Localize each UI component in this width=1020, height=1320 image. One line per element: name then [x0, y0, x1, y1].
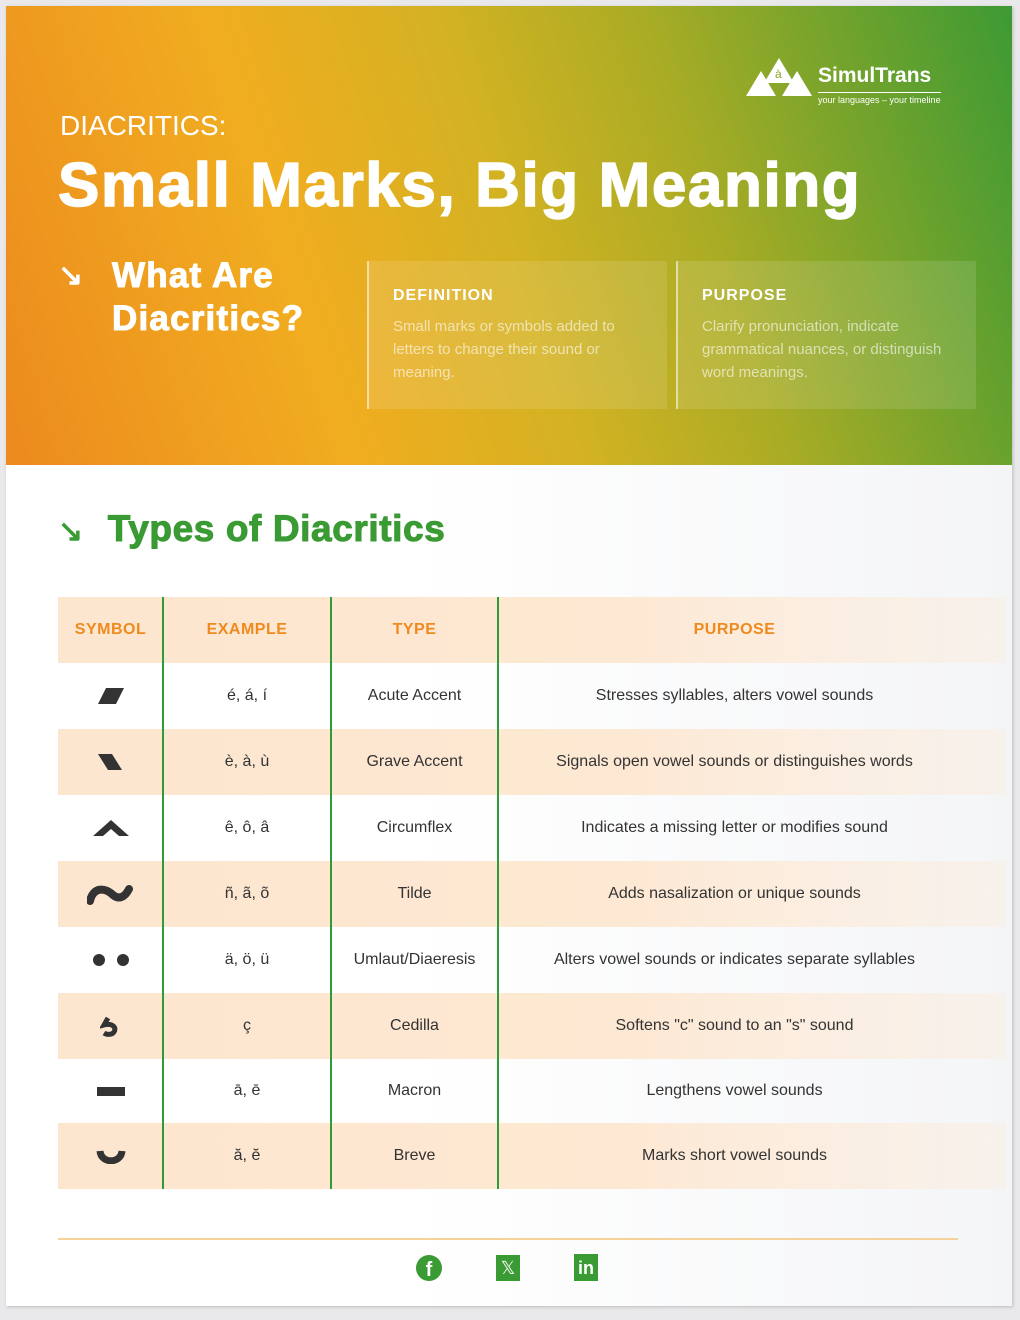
- icon: x: [496, 1255, 520, 1281]
- panel: purpose: Clarify pronunciation, indicate grammatical nuances, or distinguish word meanings.: [702, 318, 941, 381]
- table: ă, ĕ: [234, 1147, 260, 1164]
- table: ç: [243, 1017, 251, 1034]
- table: Signals open vowel sounds or distinguishes words: [556, 753, 913, 770]
- table: Acute Accent: [368, 687, 461, 704]
- table: PURPOSE: [694, 621, 775, 638]
- table: SYMBOL: [75, 621, 146, 638]
- panel: purpose: [676, 261, 976, 409]
- icon: x: 𝕏: [501, 1258, 515, 1278]
- icon: facebook: f: [426, 1259, 432, 1281]
- panel: purpose: PURPOSE: [702, 287, 787, 304]
- logo: à: [775, 67, 782, 81]
- header banner: [6, 6, 1012, 465]
- social icons: [416, 1254, 598, 1281]
- logo: SimulTrans: [818, 64, 931, 87]
- panel: definition: Small marks or symbols added to letters to change their sound or meaning.: [393, 318, 615, 381]
- logo: your languages – your timeline: [818, 95, 941, 105]
- section heading: ↘ Types of Diacritics: [58, 508, 445, 549]
- logo: [746, 58, 941, 105]
- icon: linkedin: [574, 1254, 598, 1281]
- table: Umlaut/Diaeresis: [354, 951, 475, 968]
- table: ä, ö, ü: [225, 951, 269, 968]
- table: Macron: [388, 1082, 441, 1099]
- table: Softens "c" sound to an "s" sound: [616, 1017, 853, 1034]
- subheading: what are diacritics: What Are: [112, 256, 274, 295]
- table: ñ, ã, õ: [225, 885, 269, 902]
- table: Circumflex: [377, 819, 452, 836]
- subheading: what are diacritics: ↘: [58, 259, 83, 292]
- subheading: what are diacritics: [58, 256, 304, 338]
- table: Cedilla: [390, 1017, 439, 1034]
- panel: definition: [367, 261, 667, 409]
- subheading: what are diacritics: Diacritics?: [112, 299, 304, 338]
- panel: definition: DEFINITION: [393, 287, 494, 304]
- table: Alters vowel sounds or indicates separate syllables: [554, 951, 915, 968]
- icon: linkedin: in: [578, 1258, 594, 1278]
- table: Tilde: [397, 885, 432, 902]
- title: Small Marks, Big Meaning: [58, 151, 861, 220]
- table: é, á, í: [227, 687, 267, 704]
- icon: facebook: [416, 1255, 442, 1281]
- table: Stresses syllables, alters vowel sounds: [596, 687, 873, 704]
- table: Breve: [394, 1147, 435, 1164]
- table: Marks short vowel sounds: [642, 1147, 827, 1164]
- table: Adds nasalization or unique sounds: [608, 885, 861, 902]
- table: ê, ô, â: [225, 819, 269, 836]
- table: Indicates a missing letter or modifies sound: [581, 819, 888, 836]
- table: TYPE: [393, 621, 436, 638]
- kicker: DIACRITICS:: [60, 110, 226, 141]
- table: Lengthens vowel sounds: [646, 1082, 823, 1099]
- table: ā, ē: [234, 1082, 260, 1099]
- table: EXAMPLE: [207, 621, 287, 638]
- table: Grave Accent: [366, 753, 463, 770]
- table: è, à, ù: [225, 753, 269, 770]
